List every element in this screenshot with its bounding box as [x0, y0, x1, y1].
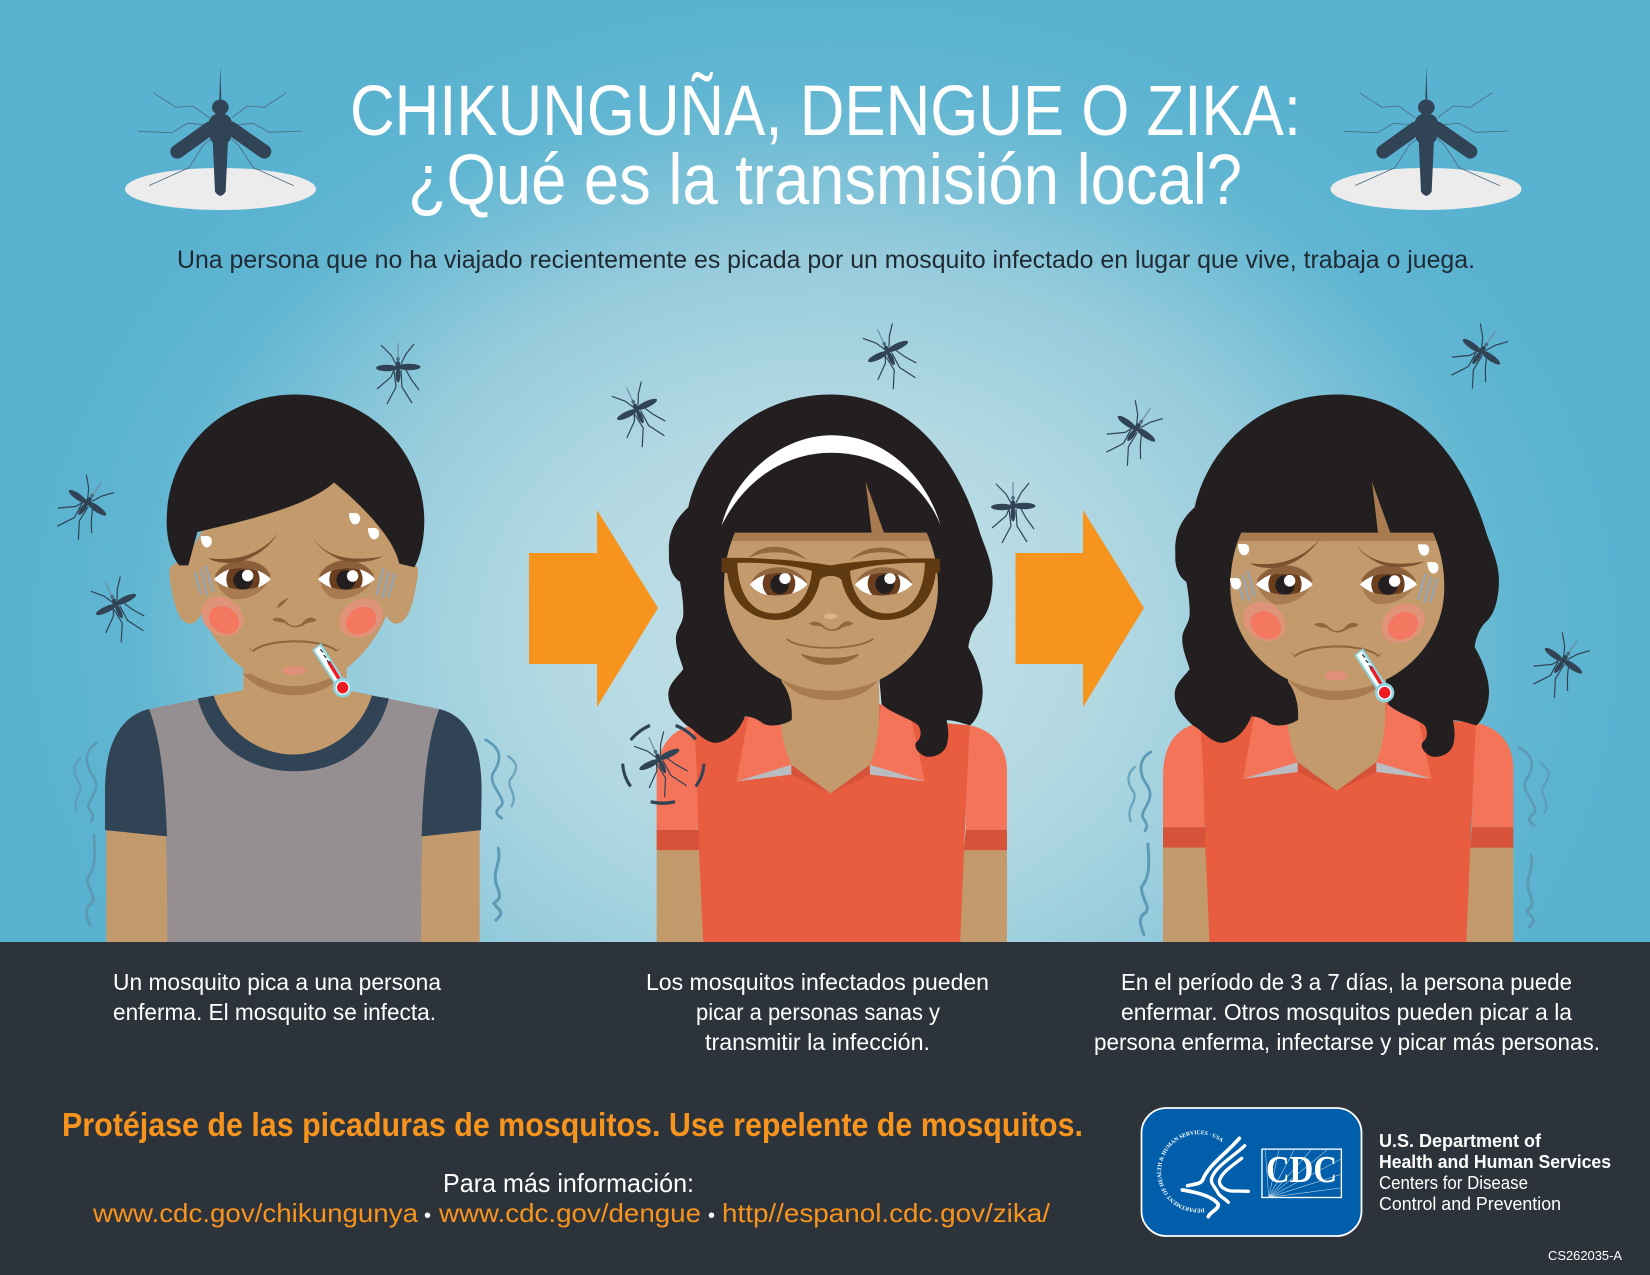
agency text: Control and Prevention [1379, 1194, 1561, 1214]
icon: mosquito left [125, 66, 316, 210]
arrow 1 [529, 510, 658, 707]
more information links: http//espanol.cdc.gov/zika/ [722, 1198, 1051, 1228]
HHS seal: DEPARTMENT OF HEALTH & HUMAN SERVICES · USA [1157, 1130, 1222, 1212]
figure: sick boy [74, 395, 516, 947]
call to action: Protéjase de las picaduras de mosquitos. Use repelente de mosquitos. [62, 1106, 1083, 1143]
figure: sick girl [1128, 395, 1549, 945]
title: CHIKUNGUÑA, DENGUE O ZIKA: [350, 72, 1301, 151]
bottom dark panel [0, 942, 1650, 1275]
caption 3: persona enferma, infectarse y picar más personas. [1094, 1029, 1600, 1055]
document code: CS262035-A [1548, 1249, 1623, 1263]
title [350, 72, 1301, 220]
caption 2: Los mosquitos infectados pueden [646, 969, 989, 995]
more information links: • [424, 1205, 431, 1227]
logo: HHS and CDC [1140, 1107, 1362, 1237]
agency text: Centers for Disease [1379, 1173, 1528, 1193]
title: ¿Qué es la transmisión local? [408, 141, 1242, 220]
caption 1 [113, 969, 441, 1025]
caption 1: Un mosquito pica a una persona [113, 969, 441, 995]
agency text [1379, 1131, 1611, 1214]
agency text: U.S. Department of [1379, 1131, 1542, 1151]
caption 3 [1094, 969, 1600, 1055]
caption 2: transmitir la infección. [705, 1029, 930, 1055]
icon: mosquito right [1330, 66, 1522, 210]
more information links: • [708, 1205, 715, 1227]
icon: biting mosquito with dashed circle [623, 725, 704, 803]
subtitle: Una persona que no ha viajado recientemente es picada por un mosquito infectado en lugar que vive, trabaja o juega. [177, 246, 1475, 274]
more information links: www.cdc.gov/chikungunya [92, 1198, 419, 1228]
caption 2 [646, 969, 989, 1055]
more information links: www.cdc.gov/dengue [438, 1198, 701, 1228]
agency text: Health and Human Services [1379, 1152, 1611, 1172]
caption 1: enferma. El mosquito se infecta. [113, 999, 436, 1025]
small flying mosquitoes [48, 319, 1596, 703]
CDC mark: CDC [1266, 1149, 1337, 1191]
more information links: Para más información: [443, 1168, 694, 1198]
figure: healthy girl with glasses [623, 395, 1007, 947]
arrow 2 [1016, 510, 1144, 707]
caption 2: picar a personas sanas y [696, 999, 940, 1025]
more information links [92, 1168, 1051, 1228]
HHS seal [1157, 1130, 1250, 1218]
glasses [722, 558, 940, 620]
caption 3: enfermar. Otros mosquitos pueden picar a la [1121, 999, 1572, 1025]
caption 3: En el período de 3 a 7 días, la persona puede [1121, 969, 1572, 995]
